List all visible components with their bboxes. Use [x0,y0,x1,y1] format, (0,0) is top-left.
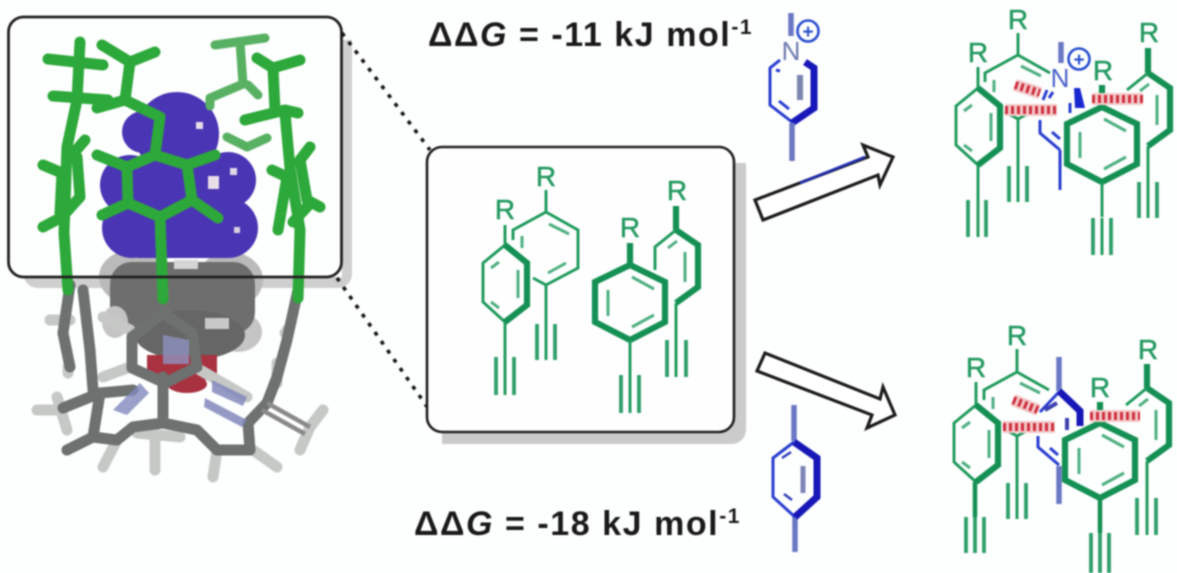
host aromatic rings: R [536,161,556,192]
heading: binding energy, toluene: ΔΔG = -18 kJ mol [414,505,719,543]
pyridinium guest in complex: + [1073,50,1085,71]
toluene guest in complex [1038,357,1080,504]
panel: host structure box [427,147,746,444]
complex: host with toluene: R [1090,372,1110,403]
pyridinium guest in complex [1040,42,1090,190]
heading: binding energy, toluene: -1 [719,505,741,528]
dashed zoom line lower [337,278,428,408]
host aromatic rings: R [620,212,640,243]
complex: host with toluene: R [1007,320,1027,351]
red oxygen surface [147,355,217,393]
complex: host with pyridinium [956,4,1170,255]
box outline [427,147,734,432]
complex: host with pyridinium: R [1093,55,1113,86]
box drop shadow [442,163,746,444]
host aromatic rings: R [667,175,687,206]
host aromatic rings [483,161,698,413]
zoom box outline [8,17,342,277]
pyridinium guest in complex: N [1051,63,1069,93]
dashed zoom line upper [342,33,430,150]
heading: binding energy, pyridinium: -1 [731,16,753,39]
guest: toluene [773,405,817,552]
arrow: to pyridinium complex [755,145,893,220]
host aromatic rings: R [495,194,515,225]
arrow: to toluene complex [757,353,895,428]
complex: host with pyridinium: R [1139,17,1159,48]
complex: host with toluene: R [1138,334,1158,365]
purple guest surface [100,92,258,258]
complex: host with toluene: R [966,352,986,383]
arrow blue tint [800,157,865,183]
complex: host with toluene [954,320,1169,573]
red CH-pi interaction marks [1005,85,1143,110]
grey aromatic surface [99,250,263,360]
red CH-pi interaction marks [1003,400,1140,427]
zoom box drop shadow [24,40,352,288]
guest: N-methyl-pyridinium [770,13,818,161]
green upper half of the cavitand [43,38,320,299]
guest: N-methyl-pyridinium: N [782,36,800,66]
complex: host with pyridinium: R [1008,4,1028,35]
panel: 3D model of the host-guest complex [8,17,352,477]
grey lower half of the cavitand [37,285,323,477]
complex: host with pyridinium: R [968,37,988,68]
heading: binding energy, pyridinium: ΔΔG = -11 kJ mol [428,16,731,54]
guest: N-methyl-pyridinium: + [802,22,814,43]
